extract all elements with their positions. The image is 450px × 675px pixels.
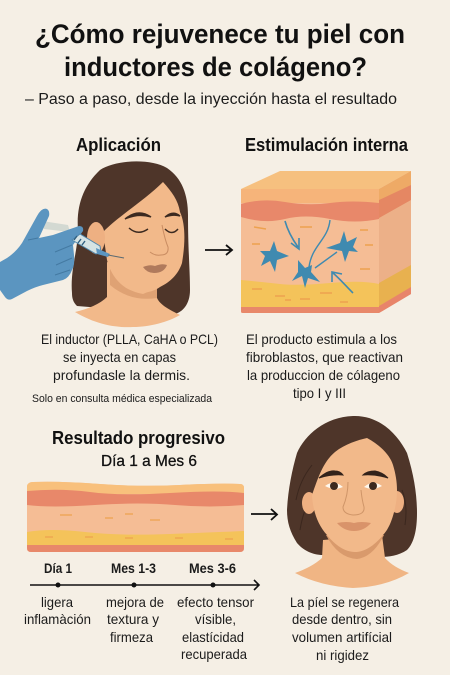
text: result description: desde dentro, sin — [292, 611, 392, 627]
title — [35, 19, 405, 82]
fibroblast stars — [260, 231, 358, 288]
timeline labels: Mes 3-6 — [189, 561, 236, 576]
illustration: skin block with fibroblasts — [241, 171, 411, 313]
timeline labels: Día 1 — [44, 561, 72, 576]
illustration: rejuvenated woman — [287, 416, 417, 588]
heading: Aplicación: Aplicación — [76, 135, 161, 155]
timeline descriptions: efecto tensor — [177, 594, 254, 610]
timeline descriptions — [24, 594, 254, 662]
note: specialist consultation: Solo en consulta médica especializada — [32, 393, 213, 405]
heading: progressive result — [52, 428, 225, 470]
timeline descriptions: firmeza — [110, 629, 153, 645]
timeline — [24, 561, 259, 662]
timeline descriptions: recuperada — [181, 646, 247, 662]
illustration: woman receiving injection — [0, 161, 190, 327]
arrow: application to stimulation — [205, 245, 232, 255]
text: result description: volumen artifícial — [292, 629, 392, 645]
timeline descriptions: vísible, — [195, 611, 236, 627]
timeline descriptions: mejora de — [106, 594, 164, 610]
text: application description: se inyecta en capas — [63, 349, 176, 365]
text: result description: ni rigidez — [316, 647, 369, 663]
title: ¿Cómo rejuvenece tu piel con — [35, 19, 405, 49]
text: result description: La píel se regenera — [290, 594, 399, 610]
text: stimulation description: fibroblastos, que reactivan — [246, 349, 403, 365]
heading: progressive result: Resultado progresivo — [52, 428, 225, 448]
illustration: skin strip — [27, 482, 244, 552]
timeline descriptions: elastícidad — [182, 629, 244, 645]
text: application description: El inductor (PLLA, CaHA o PCL) — [41, 331, 218, 347]
text: stimulation description — [246, 331, 403, 401]
arrow: strip to result — [251, 509, 277, 520]
text: application description: profundasle la dermis. — [53, 367, 190, 383]
heading: progressive result: Día 1 a Mes 6 — [101, 453, 197, 470]
text: result description — [290, 594, 399, 663]
title: inductores de colágeno? — [64, 52, 367, 82]
timeline labels — [44, 561, 236, 576]
timeline descriptions: textura y — [107, 611, 159, 627]
text: stimulation description: tipo I y III — [293, 385, 346, 401]
timeline descriptions: inflamàción — [24, 611, 91, 627]
text: stimulation description: El producto estimula a los — [246, 331, 397, 347]
text: application description — [41, 331, 218, 383]
text: stimulation description: la produccion de cólageno — [247, 367, 400, 383]
timeline labels: Mes 1-3 — [111, 561, 156, 576]
timeline descriptions: ligera — [41, 594, 73, 610]
subtitle: – Paso a paso, desde la inyección hasta el resultado — [25, 91, 397, 108]
heading: Estimulación interna: Estimulación interna — [245, 135, 409, 155]
